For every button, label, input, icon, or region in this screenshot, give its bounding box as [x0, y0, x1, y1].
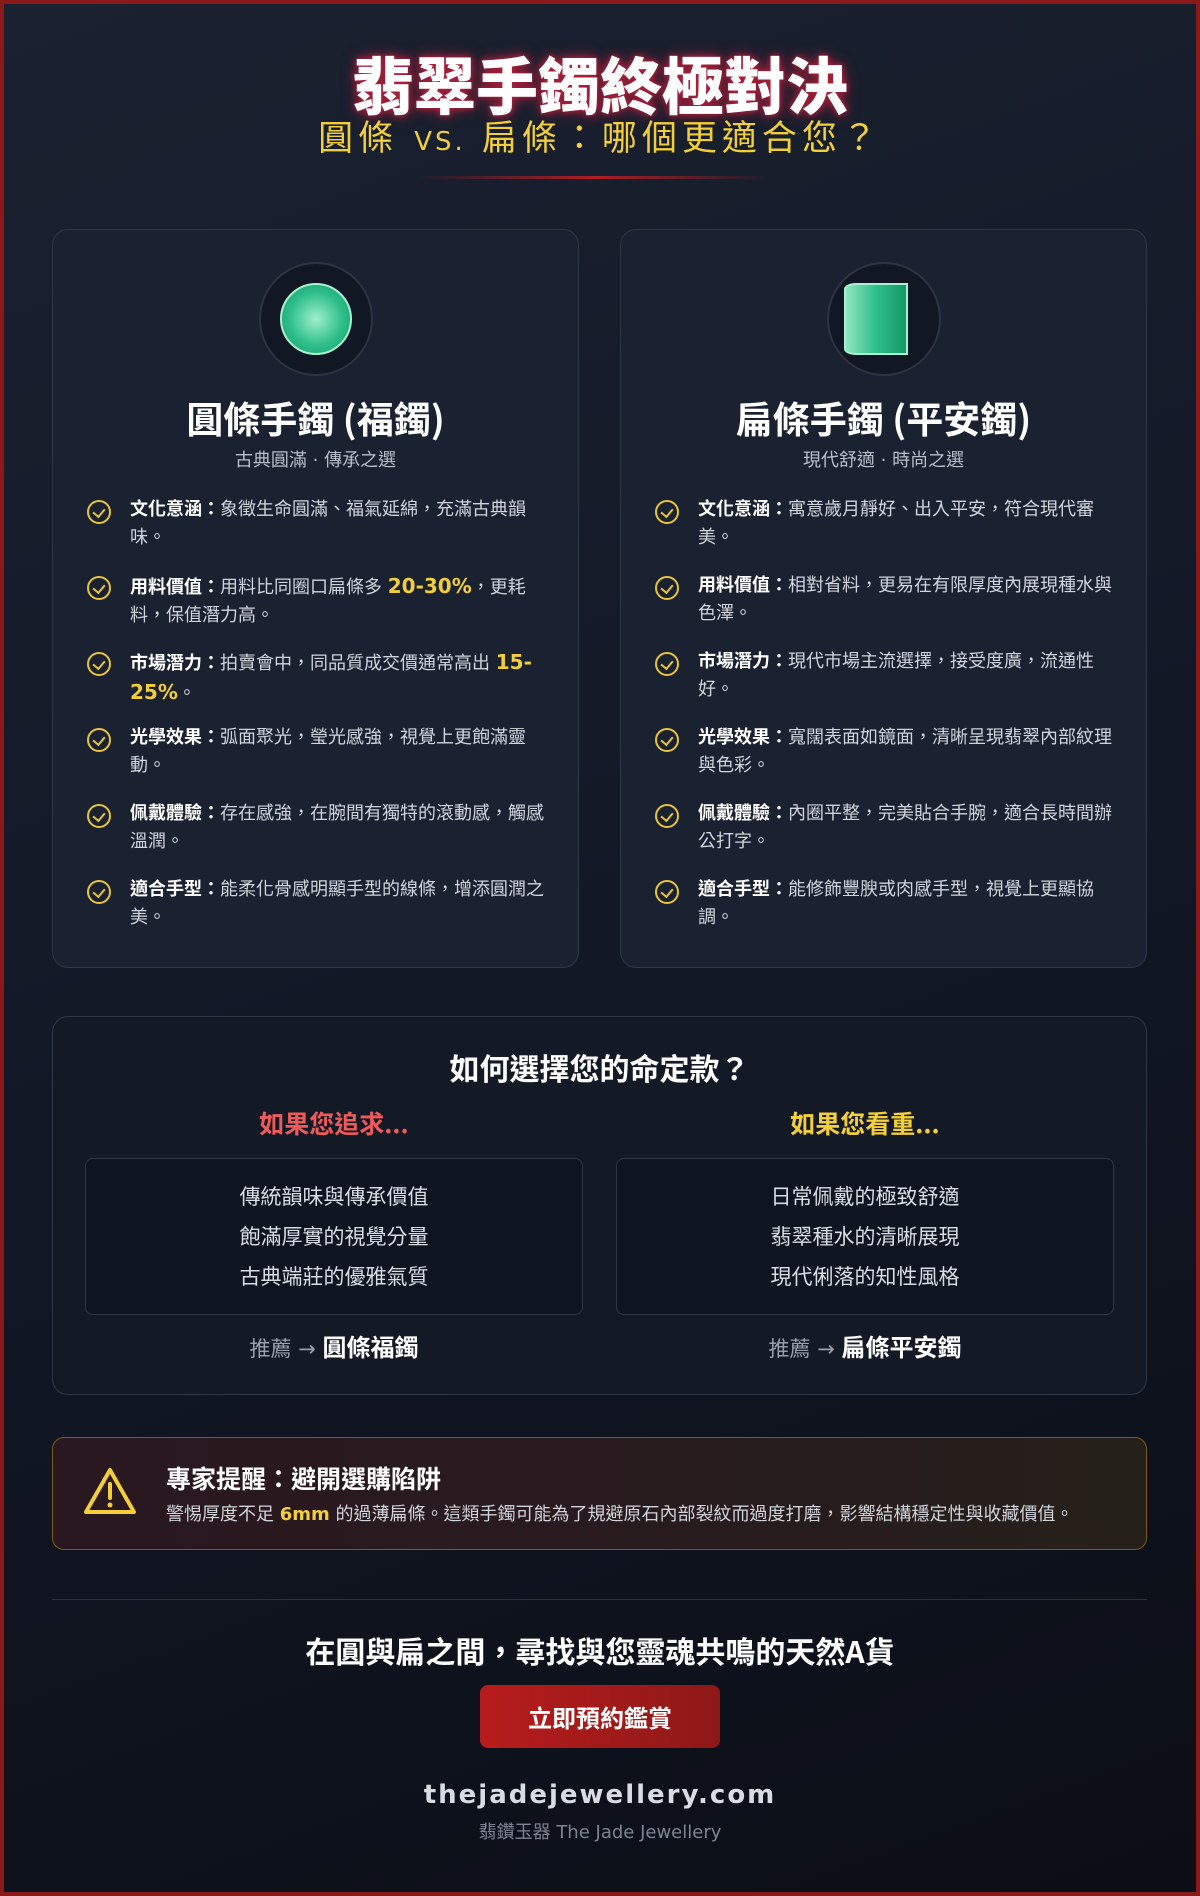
warning text: 警惕厚度不足 6mm 的過薄扁條。這類手鐲可能為了規避原石內部裂紋而過度打磨，影響結構穩定性與收藏價值。: [166, 1504, 1074, 1525]
heading: 圓條手鐲 (福鐲): [186, 390, 445, 444]
item: 適合手型：能修飾豐腴或肉感手型，視覺上更顯協調。: [698, 879, 1094, 928]
item: 用料價值：相對省料，更易在有限厚度內展現種水與色澤。: [698, 575, 1112, 624]
icon: round cross-section: [259, 262, 373, 376]
subheading: 古典圓滿 · 傳承之選: [235, 450, 396, 471]
icon: warning: [84, 1468, 136, 1514]
button: 立即預約鑑賞: [528, 1699, 672, 1734]
item: 市場潛力：現代市場主流選擇，接受度廣，流通性好。: [698, 651, 1094, 700]
list: pursue: 古典端莊的優雅氣質: [240, 1265, 428, 1289]
recommend round: 推薦 → 圓條福鐲: [250, 1334, 418, 1362]
title underline: [417, 176, 774, 179]
list: value: 日常佩戴的極致舒適: [770, 1185, 960, 1209]
list: value: 現代俐落的知性風格: [770, 1265, 960, 1289]
title: 翡翠手鐲終極對決: [352, 37, 848, 127]
item: 佩戴體驗：存在感強，在腕間有獨特的滾動感，觸感溫潤。: [130, 803, 544, 852]
warning title: 專家提醒：避開選購陷阱: [166, 1460, 441, 1496]
item: 用料價值：用料比同圈口扁條多 20-30%，更耗料，保值潛力高。: [130, 574, 526, 626]
subheading: pursue: 如果您追求...: [259, 1105, 409, 1141]
item: 適合手型：能柔化骨感明顯手型的線條，增添圓潤之美。: [130, 879, 544, 928]
website: thejadejewellery.com: [424, 1780, 776, 1810]
callout: expert warning: [52, 1437, 1147, 1550]
item: 佩戴體驗：內圈平整，完美貼合手腕，適合長時間辦公打字。: [698, 803, 1112, 852]
divider: [52, 1599, 1147, 1600]
list: value: 翡翠種水的清晰展現: [770, 1225, 960, 1249]
item: 光學效果：寬闊表面如鏡面，清晰呈現翡翠內部紋理與色彩。: [698, 727, 1112, 776]
panel: how to choose: [52, 1016, 1147, 1395]
tagline: 在圓與扁之間，尋找與您靈魂共鳴的天然A貨: [305, 1628, 895, 1672]
panel: flat bangle: [620, 229, 1147, 968]
icon: flat cross-section: [827, 262, 941, 376]
item: 市場潛力：拍賣會中，同品質成交價通常高出 15-25%。: [130, 650, 532, 704]
subheading: 現代舒適 · 時尚之選: [803, 450, 964, 471]
list: value: [616, 1158, 1114, 1315]
list: pursue: [85, 1158, 583, 1315]
item: 光學效果：弧面聚光，瑩光感強，視覺上更飽滿靈動。: [130, 727, 526, 776]
footer: 翡鑽玉器 The Jade Jewellery: [479, 1822, 721, 1843]
panel: round bangle: [52, 229, 579, 968]
recommend flat: 推薦 → 扁條平安鐲: [769, 1334, 961, 1362]
heading: 扁條手鐲 (平安鐲): [736, 390, 1031, 444]
item: 文化意涵：寓意歲月靜好、出入平安，符合現代審美。: [698, 499, 1094, 548]
heading: 如何選擇您的命定款？: [450, 1045, 750, 1089]
list: pursue: 飽滿厚實的視覺分量: [240, 1225, 428, 1249]
list: pursue: 傳統韻味與傳承價值: [240, 1185, 428, 1209]
subheading: value: 如果您看重...: [790, 1105, 940, 1141]
button: [480, 1685, 720, 1748]
item: 文化意涵：象徵生命圓滿、福氣延綿，充滿古典韻味。: [130, 499, 526, 548]
subtitle: 圓條 VS. 扁條：哪個更適合您？: [318, 119, 882, 159]
